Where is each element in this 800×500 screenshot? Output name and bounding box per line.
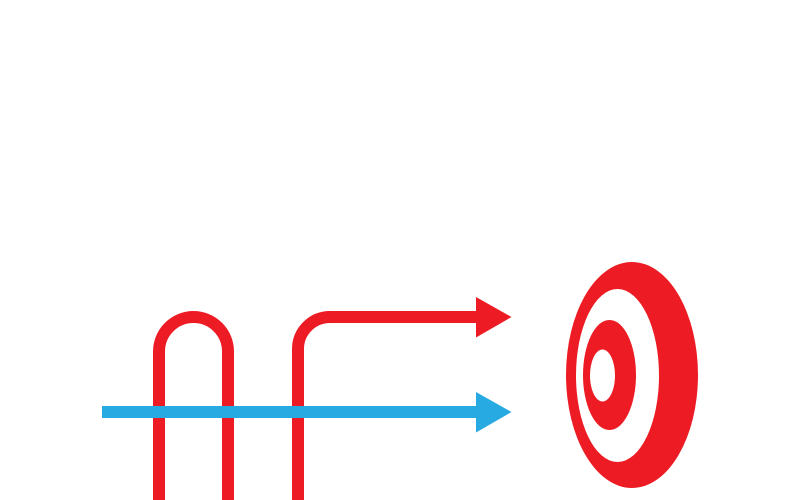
icon: target [566, 262, 698, 488]
red looping arrow [159, 297, 512, 500]
target inner red ring [583, 320, 636, 430]
target outer ring [566, 262, 698, 488]
blue straight line [102, 406, 478, 418]
blue arrowhead [476, 392, 512, 432]
red looping line [159, 317, 478, 500]
blue straight arrow [102, 392, 512, 432]
red arrowhead [476, 297, 512, 338]
target white centre [590, 350, 615, 402]
target white ring [576, 289, 659, 462]
